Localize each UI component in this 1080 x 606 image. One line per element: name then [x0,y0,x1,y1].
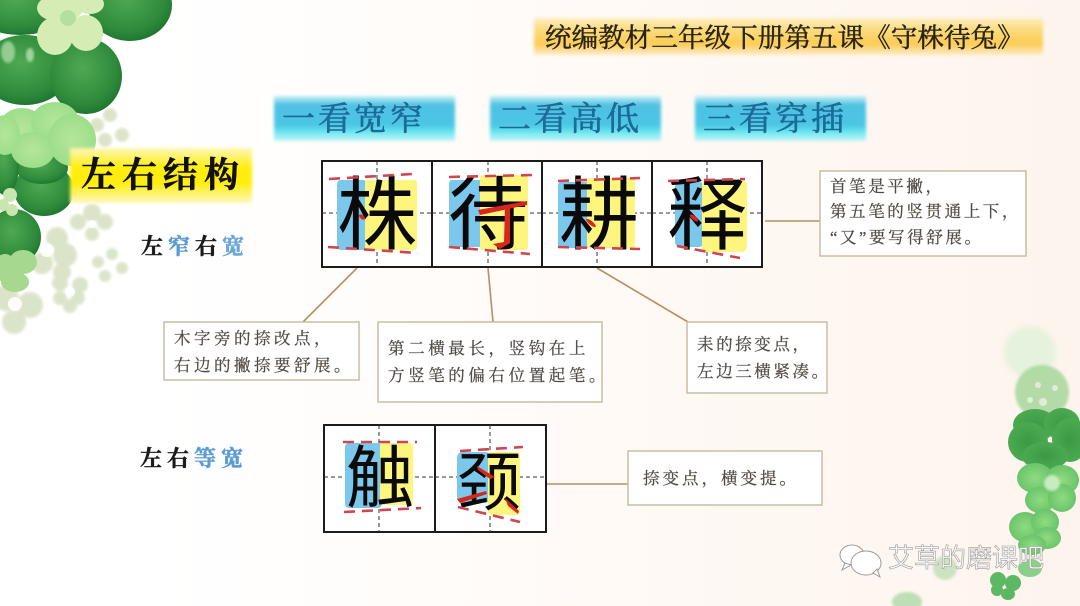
callout: 耕 note [687,322,831,393]
heading: 二看高低: 二看高低 [498,101,642,138]
callout: 颈 note [628,451,822,505]
heading: 二看高低 [490,96,661,141]
watermark: WeChat icon [840,545,881,577]
callout: 待 note: 第二横最长，竖钩在上 [388,339,589,358]
callout: 株 note: 木字旁的捺改点， [174,329,334,348]
callout: 待 note: 方竖笔的偏右位置起笔。 [388,366,609,385]
character grid: 株 [322,161,432,267]
label: 左右等宽: 左右等宽 [140,446,248,471]
callout: 株 note [164,322,359,380]
callout: 颈 note: 捺变点，横变提。 [643,469,799,488]
callout: 耕 note: 左边三横紧凑。 [697,362,831,381]
character grid: 耕: 耕 [559,171,639,260]
character grid: 释 [652,161,762,267]
heading: 三看穿插: 三看穿插 [703,101,847,138]
character grid: 颈 [435,425,546,532]
section label: 左右结构 [70,148,252,203]
callout: 释 note: “又”要写得舒展。 [830,228,984,247]
section label: 左右结构: 左右结构 [81,156,245,195]
character grid: 触 [324,425,435,532]
heading: 一看宽窄: 一看宽窄 [282,101,426,138]
character grid: 耕 [542,161,652,267]
callout: 待 note [378,322,609,402]
lesson title banner: 统编教材三年级下册第五课《守株待兔》 [545,23,1024,53]
heading: 一看宽窄 [274,96,455,141]
character grid: 株: 株 [337,171,417,260]
decoration: clover cluster top left [0,0,172,334]
watermark text: 艾草的磨课吧 [888,543,1044,573]
callout: 释 note [820,171,1026,256]
character grid: 触: 触 [346,441,414,517]
character grid: 待 [432,161,542,267]
character grid: 待: 待 [448,171,528,260]
label: 左窄右宽: 左窄右宽 [141,234,249,259]
connector lines [303,221,820,484]
character grid: 释: 释 [667,171,747,260]
callout: 耕 note: 耒的捺变点， [697,335,812,354]
callout: 株 note: 右边的撇捺要舒展。 [174,356,354,375]
callout: 释 note: 第五笔的竖贯通上下， [830,202,1021,221]
callout: 释 note: 首笔是平撇， [830,177,945,196]
character grid: 颈: 颈 [457,447,521,519]
heading: 三看穿插 [695,96,866,141]
decoration: clover cluster right [892,326,1080,606]
